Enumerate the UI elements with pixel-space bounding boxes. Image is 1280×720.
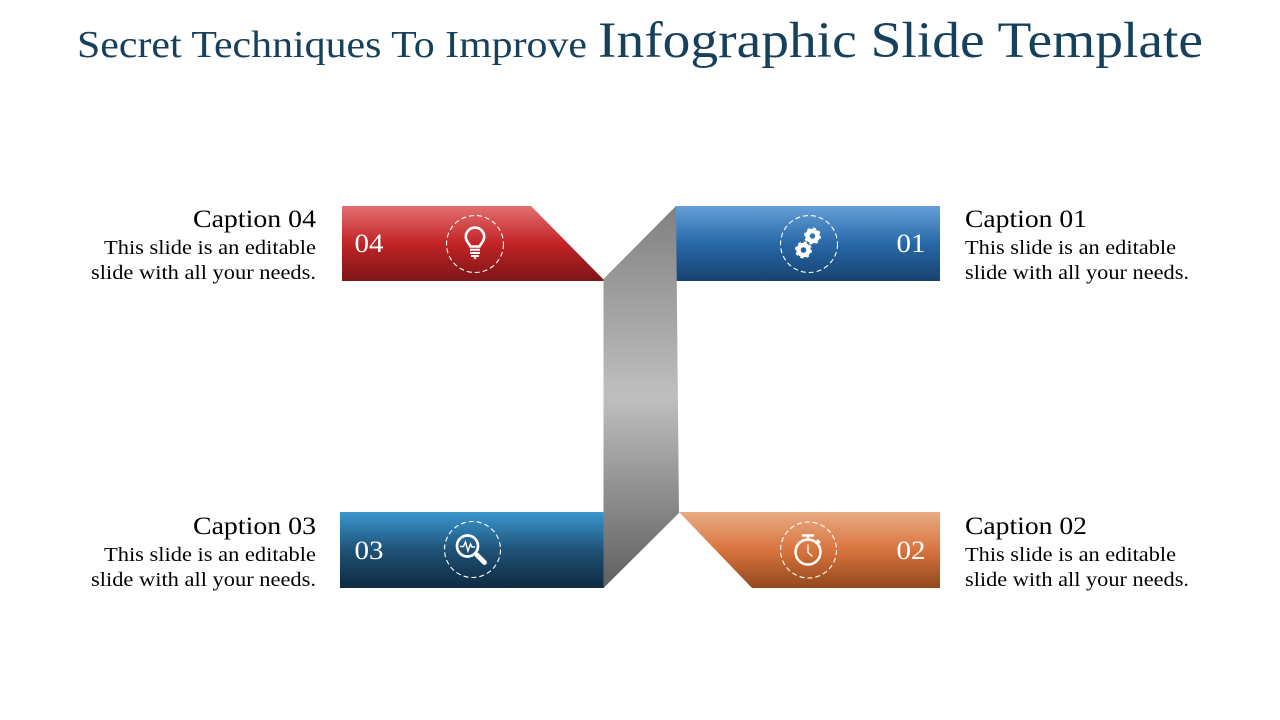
icon: light bulb	[446, 216, 504, 272]
panel: banner 04	[342, 206, 605, 281]
text block: caption 02: This slide is an editable	[965, 544, 1176, 566]
panel: banner 01	[676, 206, 940, 281]
icon: gears	[780, 216, 838, 272]
title	[77, 12, 1203, 68]
text block: caption 03: Caption 03	[193, 513, 316, 540]
text block: caption 01: This slide is an editable	[965, 237, 1176, 259]
text block: caption 04: slide with all your needs.	[91, 262, 316, 284]
text block: caption 03	[91, 513, 316, 591]
text block: caption 01: Caption 01	[965, 206, 1087, 233]
number 02: 02	[896, 535, 926, 565]
text block: caption 02: slide with all your needs.	[965, 569, 1189, 591]
text block: caption 03: This slide is an editable	[104, 544, 316, 566]
number 03: 03	[354, 535, 384, 565]
text block: caption 02: Caption 02	[965, 513, 1087, 540]
central gray ribbon	[604, 206, 679, 588]
icon: magnifier with pulse	[444, 522, 500, 578]
title: Secret Techniques To Improve	[77, 24, 587, 66]
text block: caption 03: slide with all your needs.	[91, 569, 316, 591]
text block: caption 01	[965, 206, 1189, 284]
number 04: 04	[354, 228, 384, 258]
text block: caption 04: Caption 04	[193, 206, 317, 233]
text block: caption 01: slide with all your needs.	[965, 262, 1189, 284]
text block: caption 04: This slide is an editable	[104, 237, 316, 259]
panel: banner 03	[340, 512, 604, 588]
text block: caption 04	[91, 206, 317, 284]
number 01: 01	[896, 228, 926, 258]
text block: caption 02	[965, 513, 1189, 591]
panel: banner 02	[679, 512, 940, 588]
title: Infographic Slide Template	[598, 12, 1203, 68]
icon: stopwatch	[780, 522, 836, 578]
